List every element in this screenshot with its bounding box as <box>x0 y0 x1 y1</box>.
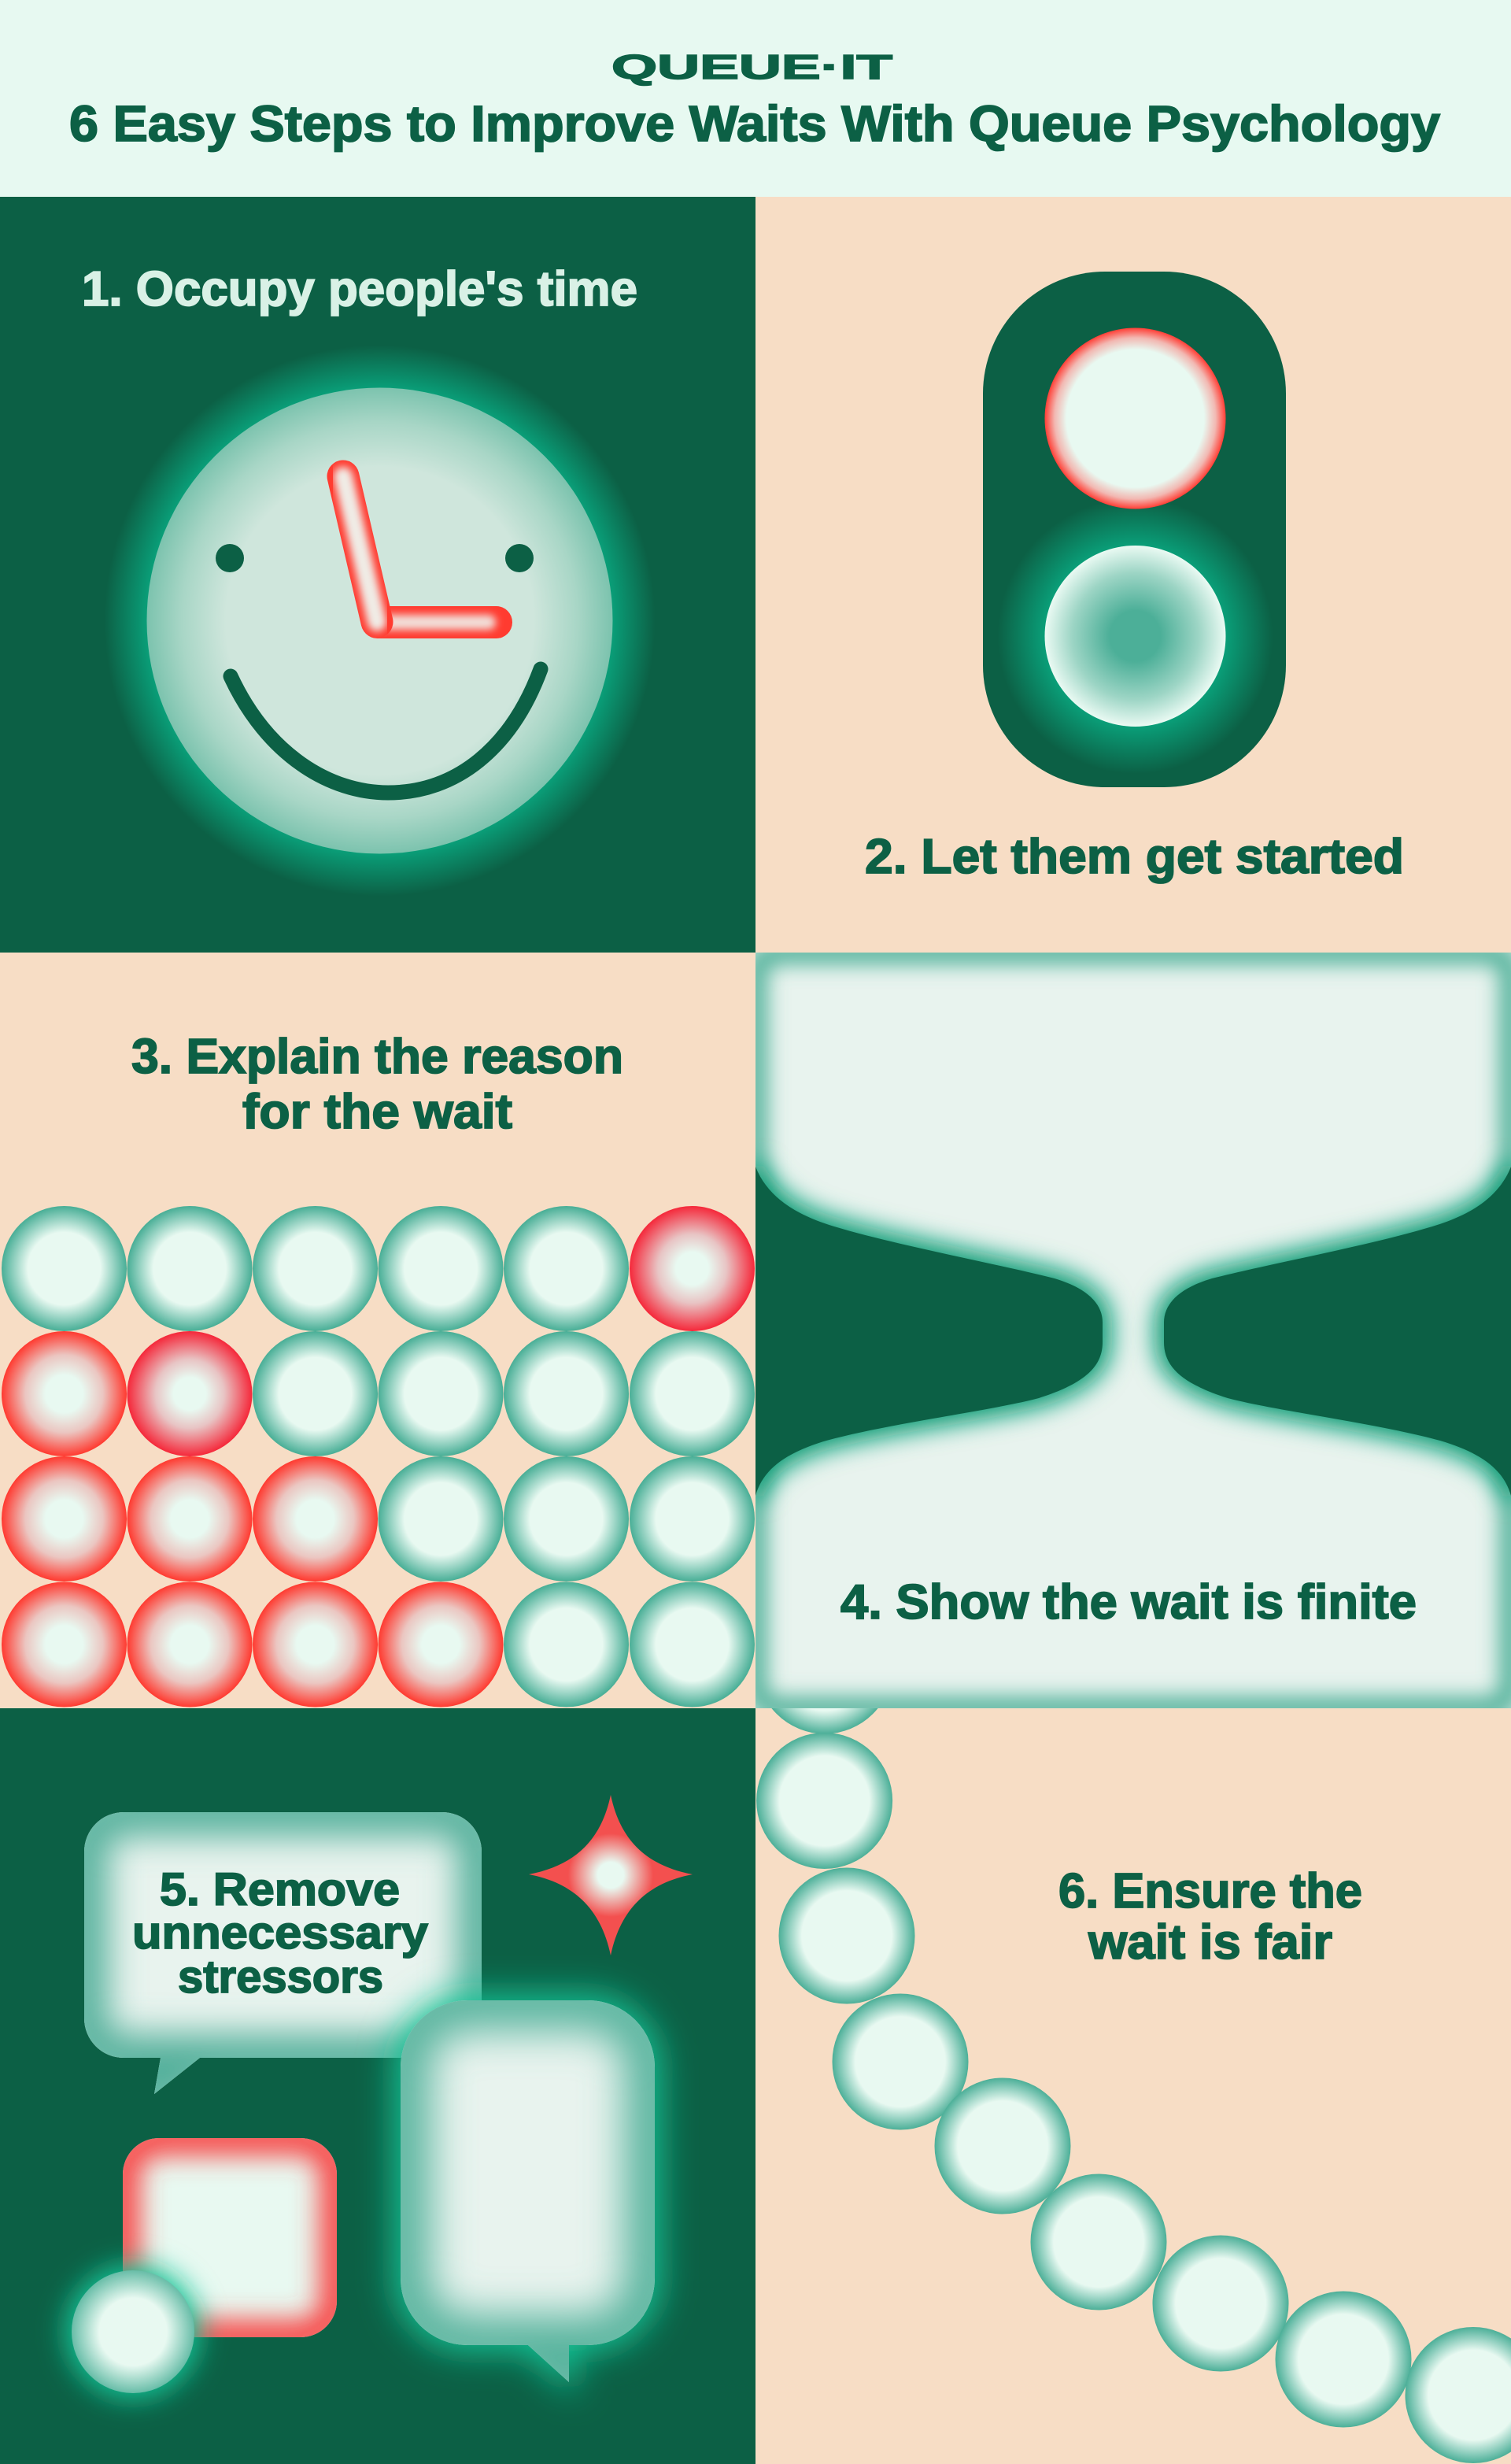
heading: step 6 <box>1058 1864 1362 1970</box>
tall speech bubble <box>393 1992 661 2385</box>
panel: step 1 occupy people's time <box>0 197 756 953</box>
icon: red sparkle star <box>529 1795 693 1955</box>
heading: step 1: 1. Occupy people's time <box>82 262 637 316</box>
panel: step 2 let them get started <box>756 197 1511 953</box>
heading: step 3: for the wait <box>242 1085 512 1139</box>
heading: step 5: unnecessary <box>132 1907 428 1959</box>
minute hand <box>343 476 377 622</box>
panel: step 5 remove unnecessary stressors <box>0 1708 756 2464</box>
heading: step 3 <box>131 1030 623 1139</box>
left eye <box>216 544 244 572</box>
icon: smiling clock face <box>104 345 655 896</box>
circle grid: queue dots <box>2 1206 755 1707</box>
heading: step 5: stressors <box>178 1952 383 2003</box>
glowing small circle <box>65 2264 201 2399</box>
row 3 <box>2 1456 755 1582</box>
empty red rounded square <box>123 2138 337 2337</box>
heading: step 5 <box>132 1864 428 2003</box>
green lamp <box>1045 546 1226 727</box>
bubble body <box>393 1992 661 2385</box>
heading: step 5: 5. Remove <box>160 1864 400 1915</box>
hour hand <box>361 606 512 638</box>
left dark lobe <box>756 1167 1103 1496</box>
row 2 <box>2 1331 755 1456</box>
speech bubble with heading <box>79 1807 488 2098</box>
bubble glow <box>401 2000 655 2382</box>
right eye <box>505 544 534 572</box>
queue of circles <box>756 1708 1511 2463</box>
title: 6 Easy Steps to Improve Waits With Queue Psychology <box>69 95 1440 152</box>
green lamp glow <box>998 498 1273 774</box>
row 4 <box>2 1582 755 1707</box>
panel: step 6 ensure the wait is fair <box>756 1708 1511 2464</box>
icon: hourglass <box>756 953 1511 1708</box>
row 1 <box>2 1206 755 1331</box>
panel: step 3 explain the reason <box>0 953 756 1708</box>
icon: traffic light <box>983 272 1286 787</box>
heading: step 3: 3. Explain the reason <box>131 1030 623 1084</box>
heading: step 2: 2. Let them get started <box>865 830 1404 884</box>
logo: Queue-it wordmark: QUEUE·IT <box>611 48 892 87</box>
red lamp <box>1045 327 1226 509</box>
smile <box>231 669 541 793</box>
heading: step 6: 6. Ensure the <box>1058 1864 1362 1918</box>
panel: step 4 show the wait is finite <box>756 953 1511 1708</box>
heading: step 6: wait is fair <box>1088 1915 1332 1970</box>
right dark lobe <box>1164 1167 1511 1496</box>
heading: step 4: 4. Show the wait is finite <box>840 1575 1417 1630</box>
header band <box>0 0 1511 197</box>
